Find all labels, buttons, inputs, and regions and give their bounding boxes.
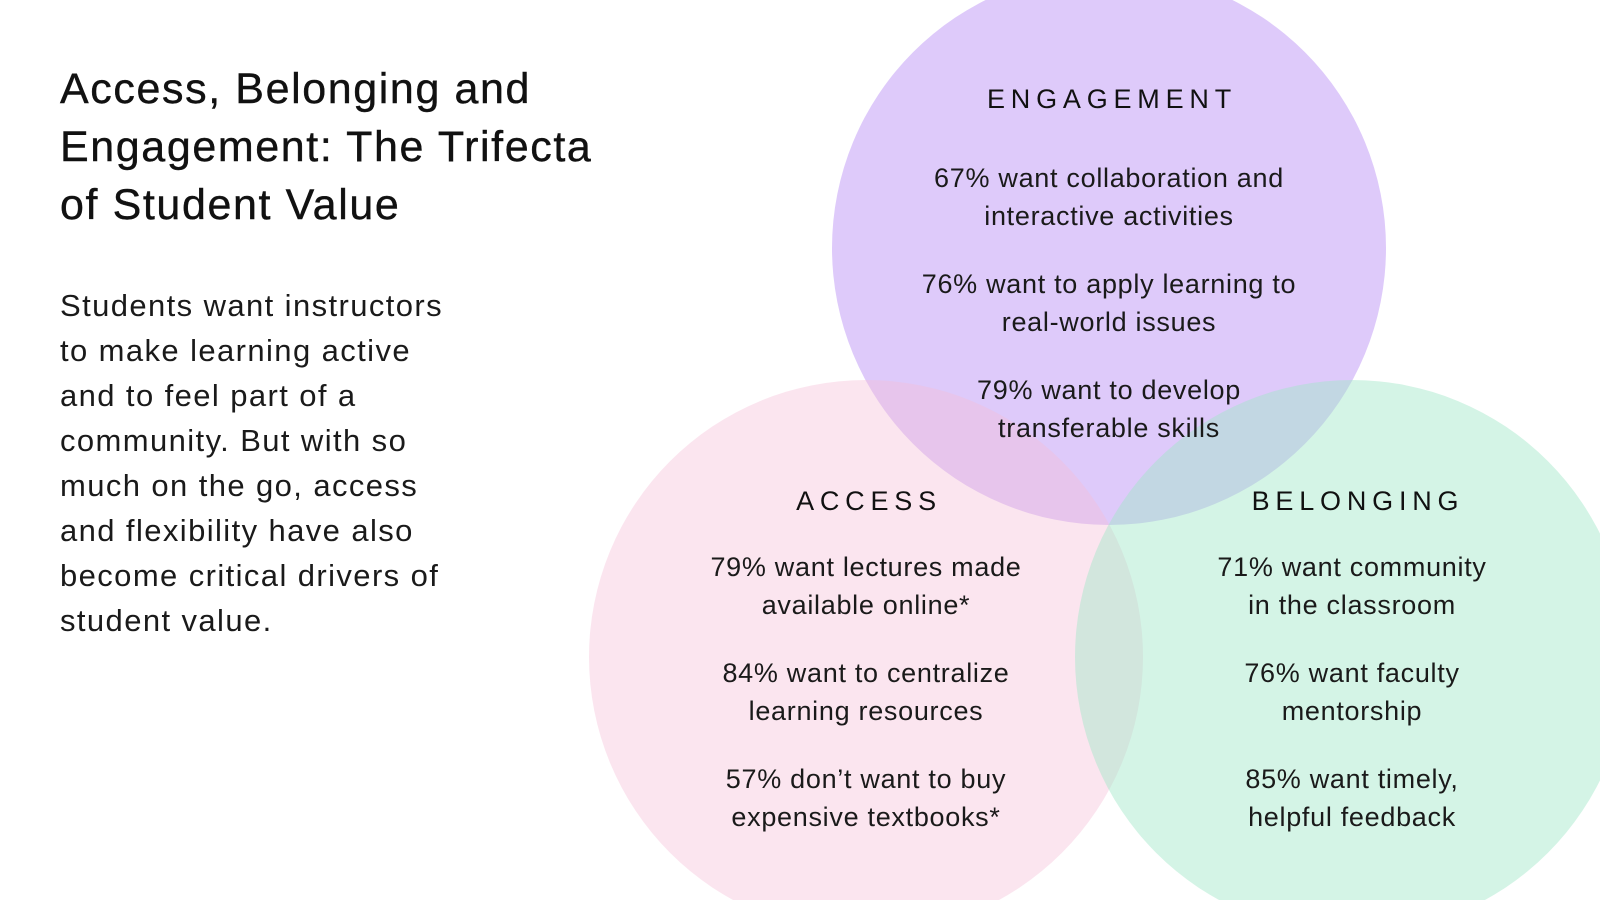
stat: mentorship: mentorship [1282,696,1422,726]
heading: engagement: ENGAGEMENT [987,84,1237,114]
stat: lectures online: available online* [762,590,970,620]
stat: feedback: 85% want timely, [1245,764,1459,794]
stat: real-world: real-world issues [1002,307,1216,337]
circle: belonging [1075,380,1600,900]
body text: and flexibility have also [60,513,414,548]
panel: engagement [922,84,1296,443]
stat: transferable skills: transferable skills [998,413,1220,443]
circle: engagement [832,0,1386,525]
title: Access, Belonging and [60,65,531,113]
stat: centralize resources [722,658,1010,726]
stat: community: in the classroom [1248,590,1456,620]
body text: Students want instructors [60,288,443,323]
panel: belonging [1217,486,1487,832]
body text: and to feel part of a [60,378,357,413]
title [60,65,592,229]
stat: textbooks: expensive textbooks* [731,802,1001,832]
stat: lectures online: 79% want lectures made [710,552,1022,582]
body text: much on the go, access [60,468,418,503]
stat: textbooks: 57% don’t want to buy [726,764,1006,794]
stat: transferable skills: 79% want to develop [977,375,1241,405]
stat: centralize resources: learning resources [749,696,983,726]
heading: belonging: BELONGING [1252,486,1464,516]
stat: community: 71% want community [1217,552,1487,582]
stat: mentorship [1244,658,1460,726]
title: Engagement: The Trifecta [60,123,592,171]
stat: centralize resources: 84% want to centralize [722,658,1010,688]
stat: collaboration: 67% want collaboration and [934,163,1284,193]
circle: access [589,380,1143,900]
title: of Student Value [60,181,400,229]
stat: lectures online [710,552,1022,620]
stat: feedback: helpful feedback [1248,802,1456,832]
body text [60,288,443,638]
stat: real-world [922,269,1296,337]
stat: collaboration [934,163,1284,231]
stat: community [1217,552,1487,620]
stat: collaboration: interactive activities [984,201,1234,231]
stat: transferable skills [977,375,1241,443]
stat: mentorship: 76% want faculty [1244,658,1460,688]
heading: access: ACCESS [796,486,942,516]
body text: community. But with so [60,423,407,458]
body text: student value. [60,603,273,638]
panel: access [710,486,1022,832]
stat: feedback [1245,764,1459,832]
body text: to make learning active [60,333,411,368]
body text: become critical drivers of [60,558,439,593]
stat: textbooks [726,764,1006,832]
stat: real-world: 76% want to apply learning to [922,269,1296,299]
